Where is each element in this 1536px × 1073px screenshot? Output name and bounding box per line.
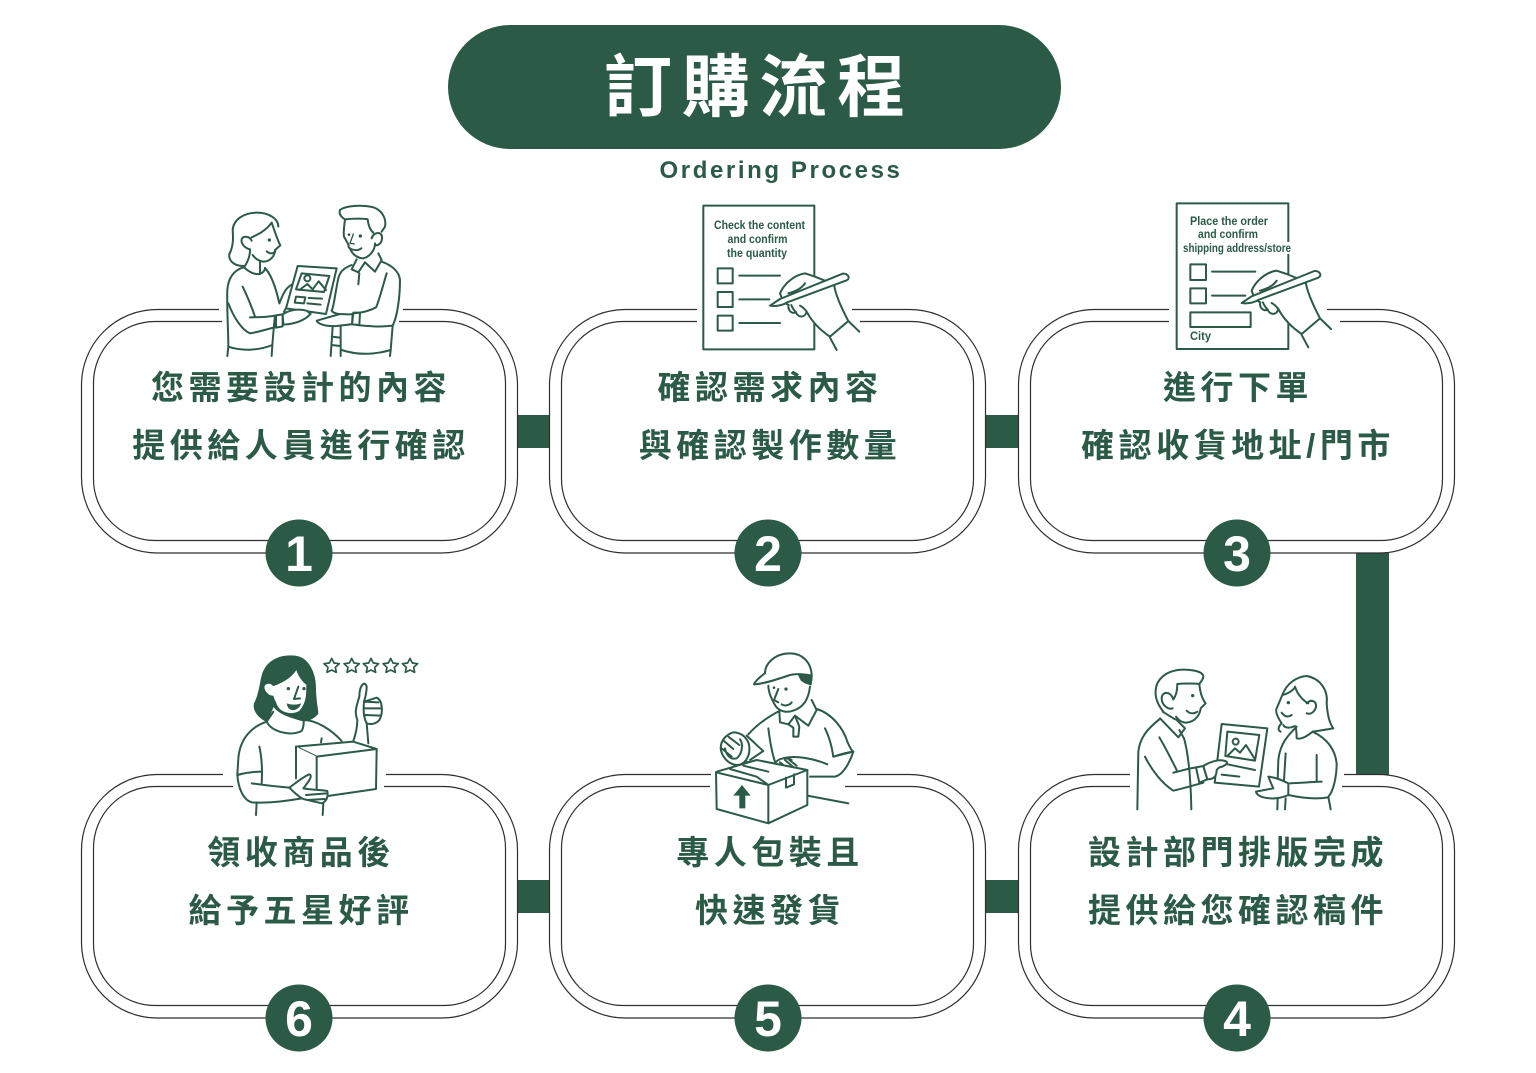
icon: checklist and hand: the quantity [727, 246, 787, 260]
connector 3 to 4 [1356, 553, 1389, 775]
step 3 text: 確認收貨地址/門市 [1081, 427, 1395, 464]
badge 4 [1204, 984, 1270, 1052]
badge 2 [734, 520, 802, 586]
step 2 text [639, 369, 901, 464]
step 5 text: 快速發貨 [695, 892, 845, 929]
step 1 text [132, 369, 470, 464]
step 2 text: 與確認製作數量 [639, 427, 901, 464]
step 1 text: 提供給人員進行確認 [132, 427, 470, 464]
panel: step 5 [550, 653, 986, 1052]
icon: order form and hand: and confirm [1198, 227, 1258, 241]
step 4 text: 提供給您確認稿件 [1088, 892, 1388, 929]
step 6 text: 給予五星好評 [188, 892, 414, 929]
title banner: 訂購流程 [604, 50, 915, 126]
icon: order form and hand: City [1190, 329, 1211, 343]
connector 2 to 3 [985, 415, 1019, 448]
step 6 text: 領收商品後 [207, 834, 395, 871]
panel: step 1 [82, 206, 518, 586]
panel: step 6 [82, 656, 518, 1052]
icon: worker taping a box [716, 653, 853, 823]
step 5 text: 專人包裝且 [676, 834, 864, 871]
icon: two people reviewing design [227, 206, 400, 356]
icon: checklist and hand: and confirm [728, 232, 788, 246]
icon: order form and hand: Place the order [1190, 214, 1268, 228]
badge 1: 1 [285, 526, 313, 582]
step 2 text: 確認需求內容 [658, 369, 882, 406]
connector 1 to 2 [517, 415, 550, 448]
step 6 text [188, 834, 414, 929]
step 3 text: 進行下單 [1163, 369, 1313, 406]
step 5 text [676, 834, 864, 929]
subtitle: Ordering Process [659, 157, 903, 184]
icon: checklist and hand [703, 206, 859, 350]
badge 4: 4 [1223, 991, 1251, 1047]
icon: customer with parcel and thumbs up [237, 656, 418, 815]
step 4 text: 設計部門排版完成 [1088, 834, 1388, 871]
badge 6: 6 [285, 991, 313, 1047]
icon: checklist and hand: Check the content [714, 218, 805, 232]
step 3 text [1081, 369, 1395, 464]
badge 5 [734, 984, 802, 1052]
panel: step 3 [1018, 203, 1454, 586]
icon: order form and hand [1177, 203, 1331, 349]
icon: order form and hand: shipping address/store [1183, 241, 1291, 255]
icon: designer showing proof to customer [1137, 670, 1337, 809]
badge 3: 3 [1223, 526, 1251, 582]
badge 6 [266, 984, 332, 1052]
connector 5 to 6 [517, 880, 550, 913]
panel: step 4 [1018, 670, 1454, 1052]
step 1 text: 您需要設計的內容 [151, 369, 451, 406]
badge 3 [1204, 520, 1270, 586]
step 4 text [1088, 834, 1388, 929]
title banner [448, 25, 1061, 149]
panel: step 2 [550, 206, 986, 586]
badge 5: 5 [754, 991, 782, 1047]
connector 4 to 5 [985, 880, 1019, 913]
badge 1 [266, 520, 332, 586]
badge 2: 2 [754, 526, 782, 582]
